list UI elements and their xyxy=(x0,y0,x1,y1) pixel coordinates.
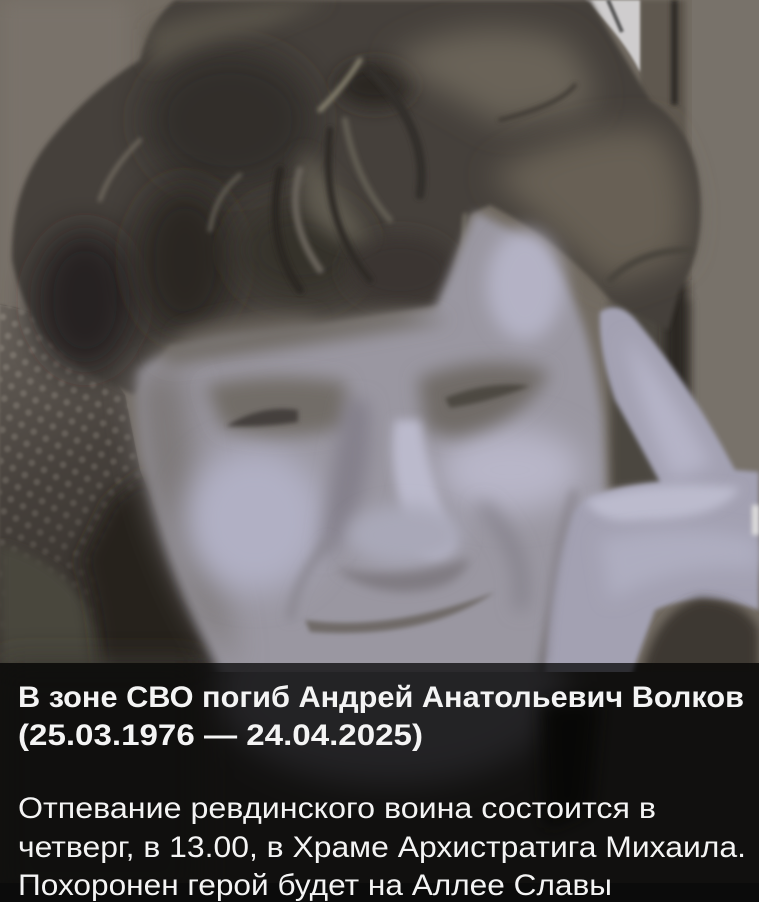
body text: funeral details xyxy=(18,792,746,902)
nostril shadow xyxy=(335,558,470,592)
cushion behind head xyxy=(0,305,235,670)
hair: lighter masses xyxy=(390,29,592,125)
left eye socket xyxy=(205,377,352,436)
left-edge shading of face xyxy=(135,370,235,670)
nose tip xyxy=(347,505,463,565)
hand with raised finger xyxy=(545,307,759,680)
hairline shadow xyxy=(150,312,450,365)
caption overlay panel xyxy=(0,663,759,883)
right eye xyxy=(445,384,530,408)
right cheek highlight xyxy=(438,428,582,512)
nose side shadow xyxy=(320,400,370,560)
mouth xyxy=(305,592,495,633)
heading: name and dates: В зоне СВО погиб Андрей Анатольевич Волков xyxy=(18,681,744,714)
background wall xyxy=(0,0,759,663)
bottom dark strip xyxy=(0,883,759,902)
shadow beneath hand xyxy=(640,598,759,680)
body text: funeral details: четверг, в 13.00, в Храме Архистратига Михаила. xyxy=(18,831,746,864)
left eye xyxy=(226,409,298,426)
forehead highlight xyxy=(487,230,563,340)
nose ridge highlight xyxy=(392,420,455,559)
hair xyxy=(12,0,701,395)
body text: funeral details: Отпевание ревдинского воина состоится в xyxy=(18,792,656,825)
left cheek highlight xyxy=(185,448,325,592)
right eye socket xyxy=(418,362,550,438)
face xyxy=(135,212,606,690)
heading: name and dates: (25.03.1976 — 24.04.2025) xyxy=(18,719,423,752)
heading: name and dates xyxy=(18,681,744,752)
nasolabial fold xyxy=(480,505,522,610)
body under caption xyxy=(0,652,759,883)
hair: dark masses xyxy=(35,230,135,370)
ring highlight xyxy=(752,505,759,535)
body text: funeral details: Похоронен герой будет на Аллее Славы xyxy=(18,869,612,902)
